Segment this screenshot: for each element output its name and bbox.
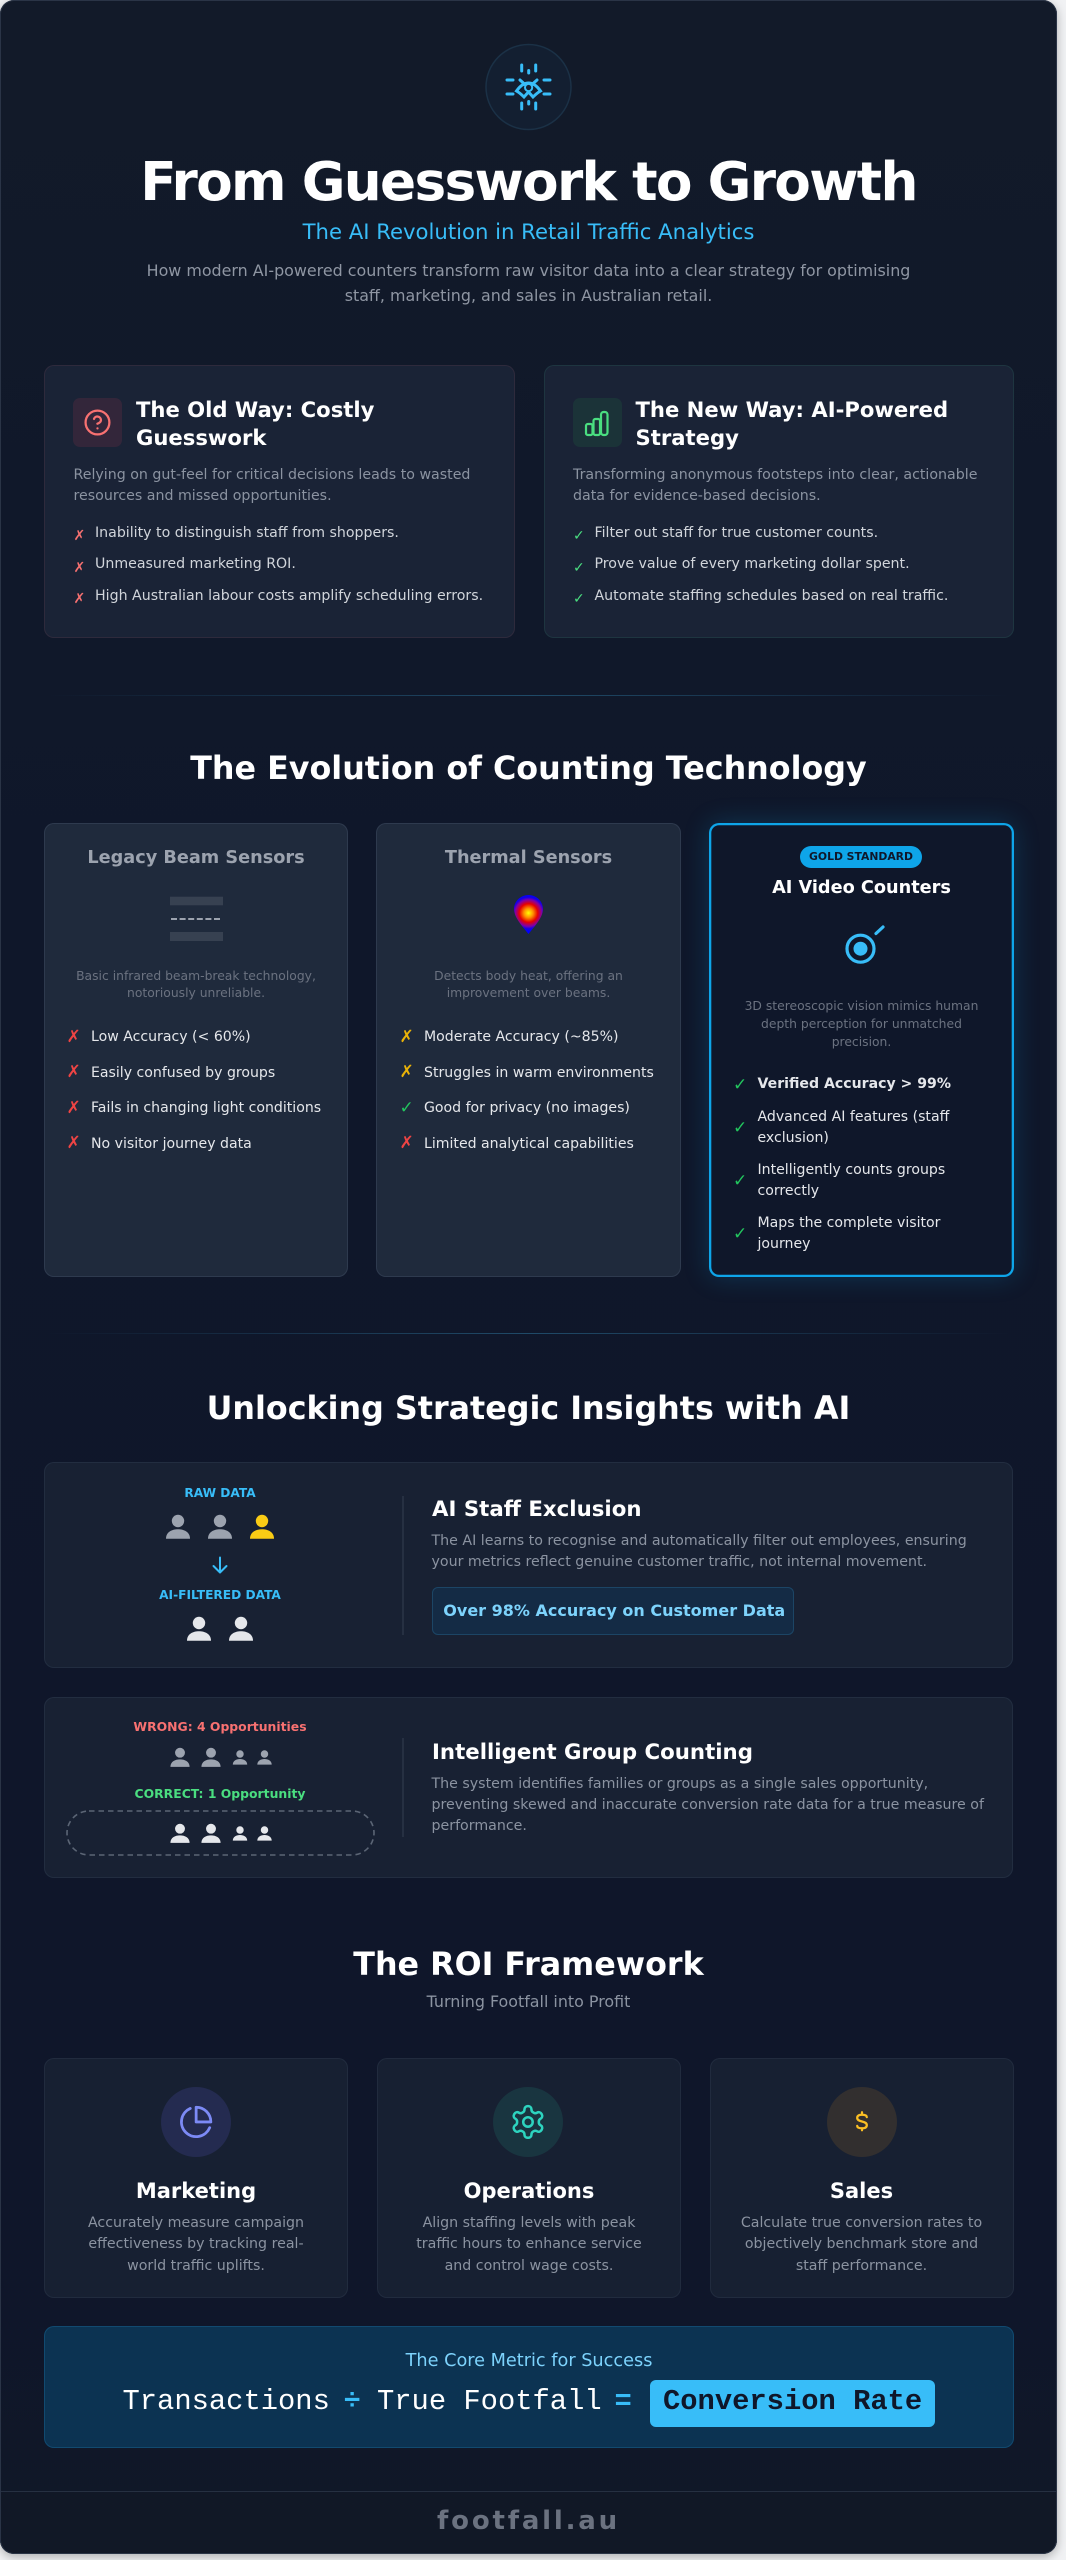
description: Relying on gut-feel for critical decisions leads to wasted — [74, 467, 470, 483]
label: correct count: CORRECT: 1 Opportunity — [135, 1786, 305, 1801]
description — [572, 467, 977, 504]
description: improvement over beams. — [447, 986, 610, 1000]
list item: ✗ — [74, 528, 85, 544]
callout: accuracy — [432, 1587, 794, 1635]
list item — [66, 1133, 252, 1153]
operator: equals: = — [614, 2385, 632, 2418]
callout: accuracy: Over 98% Accuracy on Customer Data — [443, 1601, 785, 1620]
panel: AI video counters — [709, 823, 1014, 1277]
description: effectiveness by tracking real- — [88, 2236, 304, 2252]
card title: Sales — [830, 2179, 893, 2203]
list: limits — [400, 1026, 654, 1153]
description — [377, 2213, 681, 2277]
panel: sales — [710, 2058, 1014, 2298]
list item: Low Accuracy (< 60%) — [91, 1029, 251, 1045]
list item: Advanced AI features (staff — [758, 1109, 949, 1125]
description: depth perception for unmatched — [761, 1017, 962, 1031]
list: capabilities — [733, 1074, 951, 1252]
list item: ✓ — [573, 528, 585, 544]
list item: Fails in changing light conditions — [91, 1100, 321, 1116]
formula — [44, 2326, 1014, 2448]
list: problems — [74, 524, 483, 607]
icon: dollar — [826, 2087, 896, 2157]
description — [74, 467, 470, 504]
footer — [0, 2491, 1057, 2554]
list item: ✗ — [400, 1133, 414, 1153]
description — [431, 1533, 967, 1570]
person: staff — [250, 1515, 274, 1539]
card title: Marketing — [136, 2179, 256, 2203]
icon: thermal drop — [514, 895, 543, 934]
list item: Verified Accuracy > 99% — [758, 1076, 951, 1092]
diagram: raw people and filter — [166, 1496, 404, 1641]
list item: High Australian labour costs amplify scheduling errors. — [95, 588, 483, 604]
icon: header AI eye — [485, 44, 572, 130]
brand: footfall.au: footfall.au — [437, 2506, 620, 2536]
card title: AI Video Counters — [772, 878, 951, 898]
heading — [136, 397, 374, 450]
list item: Struggles in warm environments — [424, 1064, 654, 1080]
diagram: group people — [66, 1738, 404, 1856]
description — [76, 969, 316, 1000]
badge: gold standard: GOLD STANDARD — [809, 850, 913, 863]
list item: ✓ — [400, 1098, 414, 1118]
panel: the new way — [544, 365, 1014, 638]
heading: The Old Way: Costly — [136, 397, 374, 422]
panel: operations — [377, 2058, 681, 2298]
group outline — [67, 1811, 374, 1855]
description — [434, 969, 623, 1000]
result: conversion rate — [650, 2380, 935, 2427]
intro text — [147, 261, 910, 305]
description — [710, 2213, 1014, 2277]
icon: video lens — [845, 925, 885, 964]
person: child — [233, 1750, 247, 1765]
heading: AI Staff Exclusion — [432, 1497, 642, 1522]
description: The system identifies families or groups as a single sales opportunity, — [432, 1776, 928, 1792]
description: world traffic uplifts. — [127, 2258, 265, 2274]
description: precision. — [832, 1035, 891, 1049]
description: objectively benchmark store and — [745, 2236, 978, 2252]
person: shopper — [208, 1515, 232, 1539]
description — [745, 999, 978, 1049]
icon: question mark — [73, 398, 122, 447]
panel: thermal sensors — [376, 823, 681, 1277]
label: filtered data: AI-FILTERED DATA — [159, 1588, 281, 1602]
description: Transforming anonymous footsteps into clear, actionable — [573, 467, 977, 483]
person: shopper — [166, 1515, 190, 1539]
heading — [636, 397, 948, 450]
list item: ✓ — [573, 591, 585, 607]
badge: gold standard — [800, 846, 922, 868]
description — [44, 2213, 348, 2277]
icon: pie chart — [161, 2087, 231, 2157]
heading: ROI framework: The ROI Framework — [353, 1947, 704, 1983]
subtitle: The AI Revolution in Retail Traffic Analytics — [303, 218, 754, 244]
heading: Intelligent Group Counting — [432, 1740, 753, 1765]
heading: strategic insights: Unlocking Strategic Insights with AI — [207, 1391, 850, 1427]
list item: Moderate Accuracy (~85%) — [424, 1029, 618, 1045]
metric label: The Core Metric for Success — [406, 2351, 652, 2371]
list item: Automate staffing schedules based on real traffic. — [594, 588, 948, 604]
list item — [66, 1026, 251, 1046]
list: capabilities: ✓ — [733, 1224, 747, 1244]
list: capabilities: ✓ — [733, 1171, 747, 1191]
panel: marketing — [44, 2058, 348, 2298]
description: notoriously unreliable. — [127, 986, 265, 1000]
list item: ✗ — [400, 1026, 414, 1046]
description: staff performance. — [796, 2258, 927, 2274]
list item: Prove value of every marketing dollar spent. — [594, 556, 910, 572]
description: resources and missed opportunities. — [74, 488, 332, 504]
panel: the old way — [44, 365, 515, 638]
icon: beam sensor — [170, 896, 223, 941]
list item — [733, 1215, 940, 1252]
list: benefits — [573, 524, 948, 607]
list: capabilities: correctly — [758, 1183, 819, 1199]
panel: core metric — [44, 2326, 1014, 2448]
list item: Intelligently counts groups — [758, 1162, 945, 1178]
description: Accurately measure campaign — [88, 2215, 304, 2231]
description: performance. — [432, 1818, 527, 1834]
list item: Filter out staff for true customer counts. — [594, 524, 878, 540]
person: adult — [170, 1824, 190, 1843]
panel: intelligent group counting — [44, 1697, 1013, 1878]
description: and control wage costs. — [445, 2258, 613, 2274]
intro text: How modern AI-powered counters transform raw visitor data into a clear strategy for optimising — [147, 261, 910, 280]
list: capabilities: journey — [758, 1236, 810, 1252]
description: Align staffing levels with peak — [423, 2215, 635, 2231]
list item: Limited analytical capabilities — [424, 1136, 634, 1152]
description: Detects body heat, offering an — [434, 969, 623, 983]
arrow: filter — [214, 1558, 226, 1572]
list item: No visitor journey data — [91, 1136, 252, 1152]
description: your metrics reflect genuine customer traffic, not internal movement. — [432, 1554, 927, 1570]
list item: Maps the complete visitor — [758, 1215, 940, 1231]
heading: evolution: The Evolution of Counting Technology — [190, 751, 867, 787]
intro text: staff, marketing, and sales in Australian retail. — [345, 286, 712, 305]
person: adult — [170, 1748, 190, 1767]
list item: ✗ — [66, 1098, 81, 1118]
heading: Strategy — [636, 425, 739, 450]
label: raw data: RAW DATA — [184, 1486, 256, 1500]
title: From Guesswork to Growth — [140, 151, 917, 213]
list item — [733, 1162, 945, 1199]
list item: Good for privacy (no images) — [424, 1100, 630, 1116]
card title: Thermal Sensors — [445, 848, 612, 868]
person: adult — [201, 1748, 221, 1767]
person: customer — [187, 1617, 211, 1641]
icon: gear — [493, 2087, 563, 2157]
list item: ✗ — [66, 1026, 81, 1046]
list item: Unmeasured marketing ROI. — [95, 556, 296, 572]
card title: Operations — [464, 2179, 594, 2203]
description: traffic hours to enhance service — [416, 2236, 642, 2252]
card title: Legacy Beam Sensors — [87, 848, 305, 868]
operator: divide: ÷ — [344, 2385, 361, 2418]
description — [432, 1774, 984, 1837]
list item: ✗ — [400, 1062, 414, 1082]
description: data for evidence-based decisions. — [573, 488, 821, 504]
list item: ✗ — [74, 560, 85, 576]
list: capabilities: ✓ — [733, 1118, 747, 1138]
list item: ✓ — [733, 1074, 747, 1094]
description: preventing skewed and inaccurate conversion rate data for a true measure of — [432, 1797, 984, 1813]
person: customer — [229, 1617, 253, 1641]
description: The AI learns to recognise and automatically filter out employees, ensuring — [432, 1533, 967, 1549]
list item — [733, 1109, 950, 1146]
heading: The New Way: AI-Powered — [636, 397, 948, 422]
person: child — [233, 1826, 247, 1841]
icon: bar chart — [573, 398, 622, 447]
list item: ✓ — [573, 560, 585, 576]
list item: Easily confused by groups — [91, 1064, 275, 1080]
description: Calculate true conversion rates to — [741, 2215, 982, 2231]
person: adult — [201, 1824, 221, 1843]
list: limits — [66, 1026, 321, 1153]
list item: ✗ — [66, 1062, 81, 1082]
list item: ✗ — [74, 591, 85, 607]
panel: AI staff exclusion — [44, 1462, 1013, 1668]
description: Basic infrared beam-break technology, — [76, 969, 316, 983]
list item: Inability to distinguish staff from shoppers. — [95, 524, 399, 540]
result: conversion rate: Conversion Rate — [663, 2385, 922, 2418]
person: child — [257, 1826, 272, 1841]
list item: ✗ — [66, 1133, 81, 1153]
term: transactions: Transactions — [122, 2385, 330, 2418]
label: wrong count: WRONG: 4 Opportunities — [133, 1719, 307, 1734]
description: 3D stereoscopic vision mimics human — [745, 999, 978, 1013]
list: capabilities: exclusion) — [758, 1130, 829, 1146]
subheading: Turning Footfall into Profit — [427, 1992, 630, 2011]
heading: Guesswork — [136, 425, 266, 450]
term: true footfall: True Footfall — [377, 2385, 602, 2418]
person: child — [257, 1750, 272, 1765]
panel: legacy beam sensors — [44, 823, 348, 1277]
